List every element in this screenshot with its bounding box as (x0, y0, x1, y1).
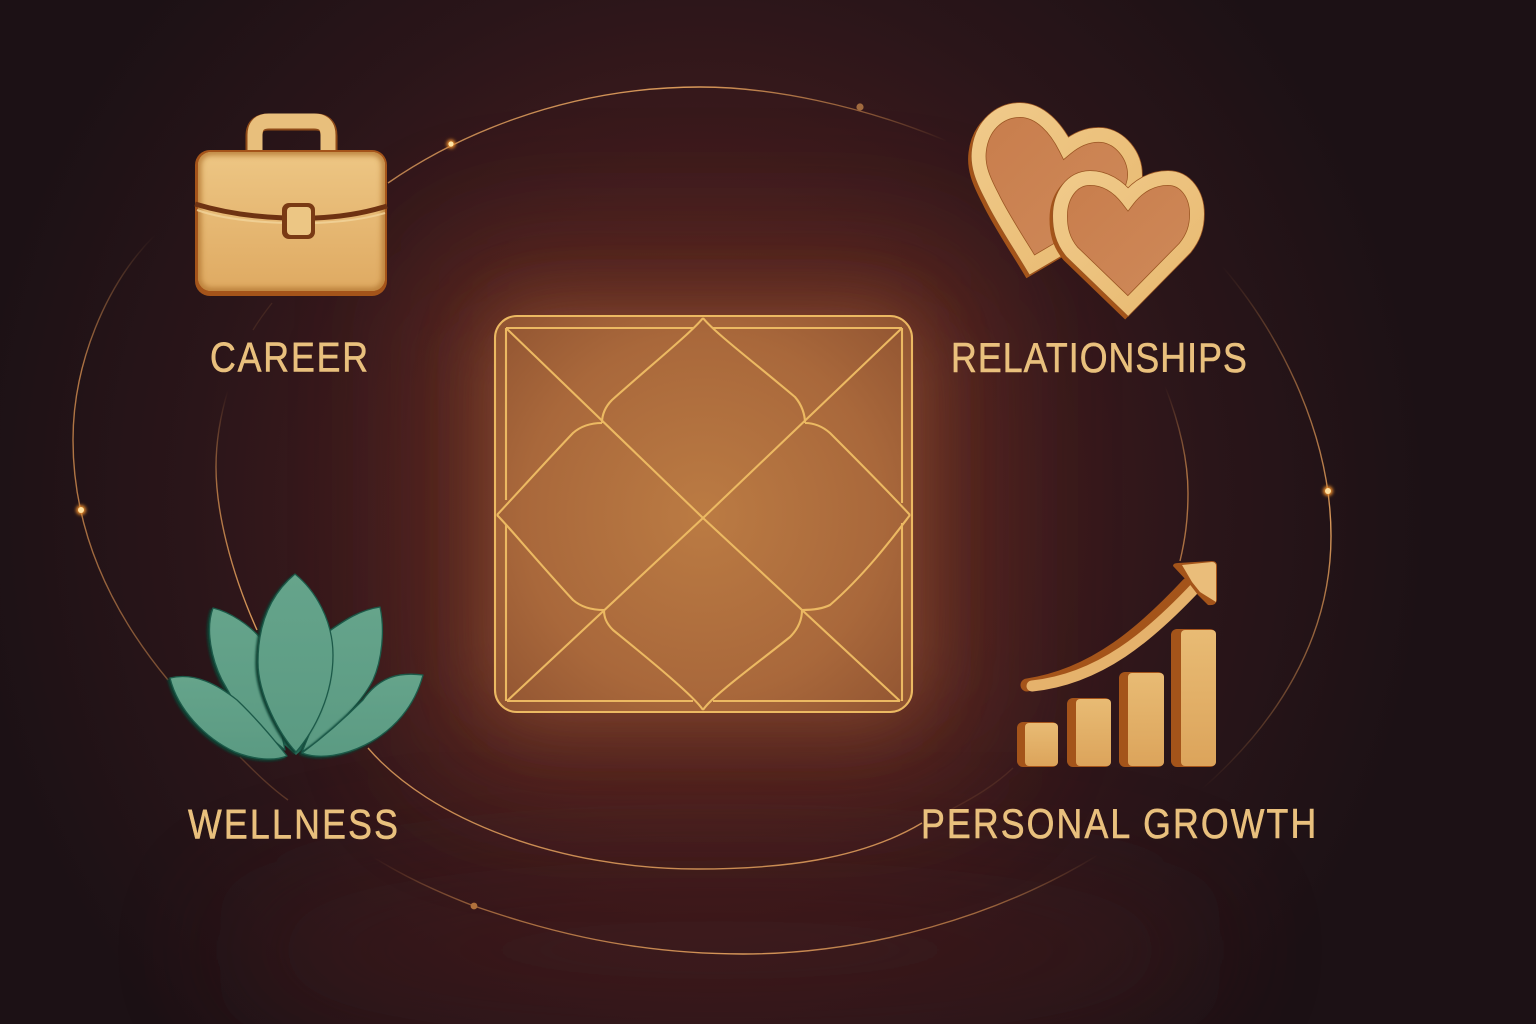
lotus base (262, 700, 330, 755)
bar 3 (1119, 672, 1164, 767)
chart lines (495, 316, 912, 712)
bar 1 (1017, 722, 1058, 767)
outer ring: left arc (73, 235, 168, 680)
right house (805, 423, 910, 515)
diagonals (506, 328, 902, 701)
briefcase body base (195, 150, 387, 296)
inner ring: left arc (216, 390, 257, 630)
icon: growth chart (1017, 561, 1217, 767)
bottom house (604, 610, 703, 710)
bar 4 (1171, 629, 1216, 767)
briefcase handle (254, 122, 329, 152)
icon: lotus (170, 574, 423, 759)
left house (497, 423, 602, 515)
inner ring: bottom arc (368, 748, 922, 869)
outer ring: top arc (388, 87, 947, 183)
outer ring: lower left arc (240, 757, 288, 800)
label: relationships: RELATIONSHIPS (951, 335, 1247, 382)
front heart (1057, 178, 1197, 309)
briefcase flap seam (197, 210, 385, 223)
label: career: CAREER (210, 335, 368, 381)
icon: hearts (976, 110, 1197, 309)
icon: briefcase (195, 121, 387, 296)
chart panel (495, 316, 912, 712)
center petal (258, 574, 333, 752)
left upper petal (210, 608, 285, 750)
inner ring: upper left faint arc (253, 303, 272, 330)
top house (602, 318, 703, 423)
briefcase bevel (198, 152, 385, 291)
arrow shaft (1027, 584, 1188, 685)
orbit dots (76, 103, 1333, 909)
right upper petal (302, 607, 382, 752)
inner frame (506, 328, 902, 701)
back heart (976, 110, 1135, 268)
label: personal growth: PERSONAL GROWTH (921, 801, 1316, 848)
inner ring: lower right faint arc (950, 768, 1013, 810)
bar 2 (1067, 698, 1111, 767)
briefcase body (198, 152, 385, 291)
right lower petal (302, 674, 423, 756)
label: wellness: WELLNESS (188, 802, 398, 848)
briefcase clasp (282, 203, 315, 239)
orbit rings (73, 87, 1331, 954)
arrow head (1173, 561, 1217, 605)
left lower petal (170, 677, 287, 759)
outer ring: right arc (1202, 266, 1331, 789)
central chart (495, 316, 912, 712)
inner ring: right arc (1165, 386, 1188, 561)
outer ring: bottom arc (373, 855, 1098, 954)
